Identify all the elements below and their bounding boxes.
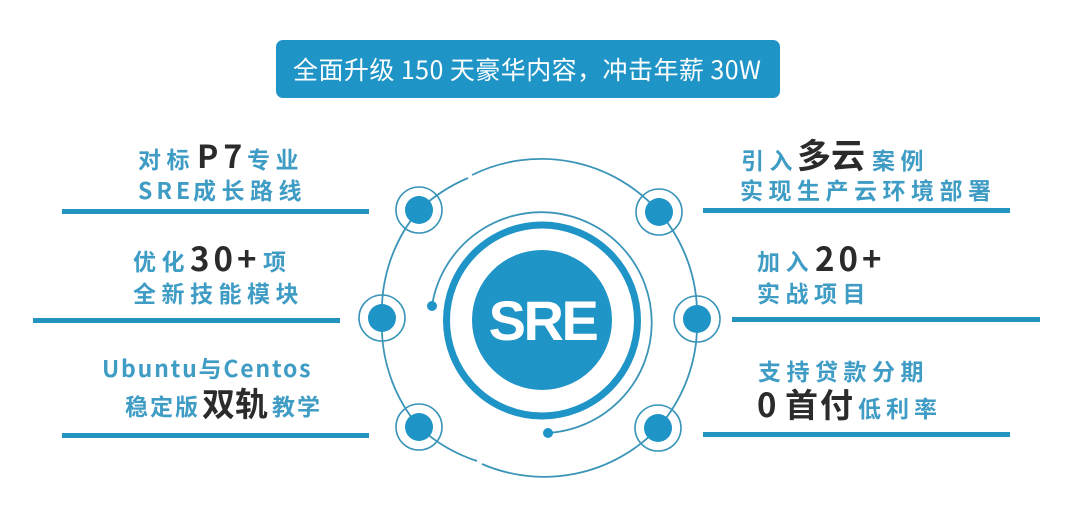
panel: right item 1: 多云 bbox=[797, 129, 865, 178]
title banner bbox=[276, 40, 780, 98]
panel: left item 1: SRE bbox=[138, 172, 194, 206]
panel: left item 2: 30+ bbox=[190, 233, 260, 281]
panel: left item 1: 成长路线 bbox=[193, 172, 307, 206]
panel: left item 2: 优化 bbox=[133, 243, 190, 277]
panel: right item 1: 案例 bbox=[872, 142, 929, 176]
node: bottom right bbox=[635, 405, 681, 451]
panel: left item 3: 稳定版 bbox=[125, 388, 200, 422]
panel: right item 1: 引入 bbox=[741, 142, 798, 176]
panel: right item 3: 首付 bbox=[785, 379, 855, 427]
panel: left item 2: 项 bbox=[263, 243, 292, 277]
panel: right item 2 bbox=[732, 233, 1040, 322]
panel: left item 3: Ubuntu与Centos bbox=[102, 350, 312, 384]
node: middle left bbox=[359, 295, 405, 341]
panel: left item 3: 双轨 bbox=[202, 378, 268, 426]
node: top right bbox=[636, 189, 682, 235]
panel: left item 3 bbox=[62, 350, 369, 438]
node: middle right bbox=[674, 296, 720, 342]
panel: right item 1 bbox=[703, 129, 1010, 213]
panel: right item 3: 低利率 bbox=[858, 390, 942, 424]
panel: right item 3: 支持贷款分期 bbox=[758, 353, 929, 387]
panel: left item 1 bbox=[62, 132, 369, 214]
panel: right item 3 bbox=[703, 353, 1010, 437]
panel: left item 1: 专业 bbox=[247, 141, 304, 175]
panel: right item 2: 20+ bbox=[815, 233, 885, 281]
panel: left item 1: P7 bbox=[197, 132, 247, 178]
center disc with SRE: SRE bbox=[489, 289, 597, 352]
panel: left item 3: 教学 bbox=[272, 388, 322, 422]
panel: left item 2 bbox=[33, 233, 340, 323]
node: bottom left bbox=[396, 404, 442, 450]
panel: right item 2: 加入 bbox=[757, 243, 814, 277]
panel: right item 3: 0 bbox=[757, 379, 776, 427]
thick ring bbox=[446, 225, 638, 416]
center disc with SRE bbox=[472, 250, 612, 390]
panel: right item 2: 实战项目 bbox=[757, 275, 871, 309]
outer orbit bbox=[382, 159, 697, 477]
central diagram bbox=[359, 159, 720, 477]
node: top left bbox=[396, 187, 442, 233]
inner arc with end dots bbox=[427, 212, 652, 438]
panel: right item 1: 实现生产云环境部署 bbox=[740, 172, 996, 206]
panel: left item 1: 对标 bbox=[138, 141, 195, 175]
title banner: 全面升级 150 天豪华内容，冲击年薪 30W bbox=[293, 51, 761, 87]
panel: left item 2: 全新技能模块 bbox=[133, 275, 304, 309]
